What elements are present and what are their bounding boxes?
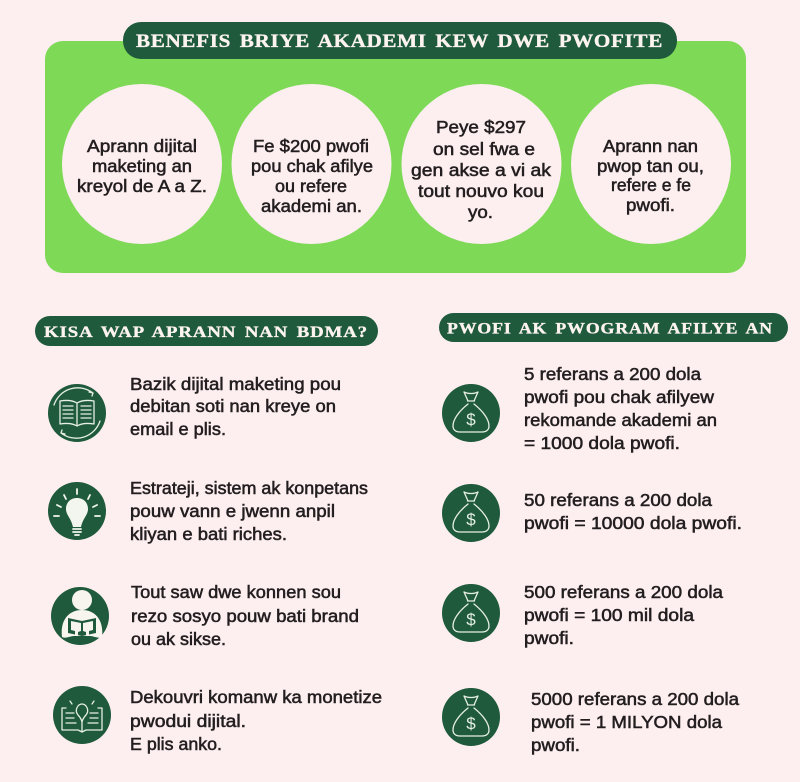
benefit circle 1: kreyol de A a Z. <box>77 176 207 196</box>
text: 5000 referrals <box>531 689 739 755</box>
text: social networks: rezo sosyo pouw bati brand <box>131 606 359 626</box>
icon: light bulb <box>48 482 106 540</box>
text: 5 referrals: rekomande akademi an <box>524 410 717 430</box>
text: monetize: E plis anko. <box>130 734 222 754</box>
text: basics: Bazik dijital maketing pou <box>130 374 341 394</box>
heading: left column <box>35 316 378 346</box>
benefit circle 2 <box>232 84 392 244</box>
text: 5 referrals <box>524 364 717 453</box>
text: strategy: kliyan e bati riches. <box>130 524 287 544</box>
icon: money bag 1 <box>442 384 500 442</box>
text: 500 referrals: pwofi. <box>524 628 574 648</box>
text: 5000 referrals: pwofi = 1 MILYON dola <box>531 712 722 732</box>
text: 500 referrals: 500 referans a 200 dola <box>524 582 723 602</box>
benefit circle 1 <box>62 84 222 244</box>
text: 50 referrals <box>524 490 742 533</box>
title: BENEFIS BRIYE AKADEMI KEW DWE PWOFITE <box>136 31 663 52</box>
icon: money bag 1: $ <box>466 410 476 429</box>
benefit circle 4: refere e fe <box>611 175 691 195</box>
text: 500 referrals <box>524 582 723 648</box>
heading: right column <box>439 313 788 342</box>
text: strategy: pouw vann e jwenn anpil <box>130 501 335 521</box>
text: 50 referrals: 50 referans a 200 dola <box>524 490 712 510</box>
text: 5 referrals: 5 referans a 200 dola <box>524 364 701 384</box>
benefit circle 4: Aprann nan <box>603 136 698 156</box>
text: social networks <box>131 582 359 649</box>
text: basics <box>130 374 341 439</box>
benefit circle 2: Fe $200 pwofi <box>253 136 369 156</box>
benefit circle 3 <box>402 84 562 244</box>
icon: book with arrows <box>48 384 106 442</box>
title <box>123 22 677 59</box>
benefit circle 3: on sel fwa e <box>433 139 535 159</box>
benefit circle 1: Aprann dijital <box>87 136 197 156</box>
text: strategy <box>130 478 368 544</box>
benefit circle 2: pou chak afilye <box>251 156 373 176</box>
heading: left column: KISA WAP APRANN NAN BDMA? <box>44 324 368 341</box>
icon: money bag 4 <box>442 688 500 746</box>
panel: benefits <box>45 41 746 273</box>
benefit circle 3: tout nouvo kou <box>418 181 544 201</box>
text: 5 referrals: pwofi pou chak afilyew <box>524 387 714 407</box>
text: 5000 referrals: 5000 referans a 200 dola <box>531 689 739 709</box>
text: social networks: Tout saw dwe konnen sou <box>131 582 341 602</box>
benefit circle 4 <box>571 84 731 244</box>
text: 5000 referrals: pwofi. <box>531 735 580 755</box>
heading: right column: PWOFI AK PWOGRAM AFILYE AN <box>447 320 773 338</box>
icon: money bag 2 <box>442 484 500 542</box>
text: 500 referrals: pwofi = 100 mil dola <box>524 605 694 625</box>
icon: money bag 2: $ <box>466 510 476 529</box>
text: strategy: Estrateji, sistem ak konpetans <box>130 478 368 498</box>
icon: money bag 3: $ <box>466 610 476 629</box>
benefit circle 4: pwop tan ou, <box>597 156 704 176</box>
benefit circle 3: yo. <box>468 202 493 222</box>
benefit circle 2: akademi an. <box>261 196 362 216</box>
icon: money bag 3 <box>442 584 500 642</box>
text: monetize <box>130 687 382 754</box>
icon: book with idea bulb <box>53 686 111 744</box>
icon: money bag 4: $ <box>466 714 476 733</box>
text: basics: debitan soti nan kreye on <box>130 396 336 416</box>
text: 50 referrals: pwofi = 10000 dola pwofi. <box>524 513 742 533</box>
benefit circle 3: gen akse a vi ak <box>411 160 551 180</box>
icon: person reading <box>51 587 109 645</box>
benefit circle 2: ou refere <box>275 176 347 196</box>
text: 5 referrals: = 1000 dola pwofi. <box>524 433 680 453</box>
text: basics: email e plis. <box>130 419 226 439</box>
text: social networks: ou ak sikse. <box>131 629 226 649</box>
benefit circle 1: maketing an <box>92 156 192 176</box>
benefit circle 3: Peye $297 <box>436 117 526 137</box>
text: monetize: pwodui dijital. <box>130 711 246 731</box>
benefit circle 4: pwofi. <box>626 195 675 215</box>
text: monetize: Dekouvri komanw ka monetize <box>130 687 382 707</box>
